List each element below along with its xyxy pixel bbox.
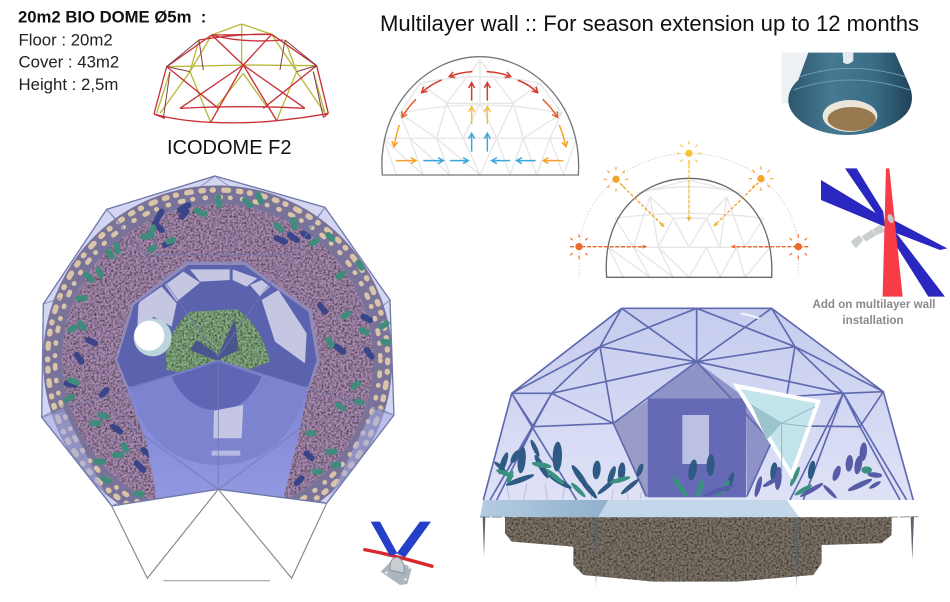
geodesic pattern bbox=[383, 60, 577, 175]
caption: multilayer wall installation bbox=[812, 298, 936, 327]
plinth right bbox=[787, 500, 918, 518]
spec floor: Floor : 20m2 bbox=[18, 30, 113, 50]
outer dome rim bbox=[42, 176, 394, 506]
highlight bbox=[741, 313, 759, 318]
lower rim tint bbox=[42, 408, 394, 506]
center planter bbox=[166, 309, 270, 374]
sun upper left bbox=[604, 167, 628, 192]
stone ring bbox=[53, 195, 383, 525]
spec height: Height : 2,5m bbox=[18, 75, 118, 94]
loose film bbox=[782, 53, 808, 103]
spec cover: Cover : 43m2 bbox=[18, 52, 119, 72]
porthole light bbox=[134, 318, 172, 356]
support legs bbox=[112, 489, 327, 578]
sun arc dotted bbox=[579, 153, 798, 277]
dome struts bbox=[42, 176, 394, 506]
blue struts bbox=[821, 168, 947, 297]
door bbox=[648, 398, 746, 497]
light reflection panel bbox=[213, 405, 243, 438]
gravel bed bbox=[62, 205, 373, 515]
icon: dome frame model bbox=[154, 24, 328, 123]
planter shadow bbox=[190, 318, 238, 361]
sun left bbox=[570, 234, 588, 259]
leaves purple-blue bbox=[702, 442, 882, 500]
pane facets bbox=[752, 405, 815, 475]
plate holes bbox=[385, 567, 411, 580]
blue struts bbox=[371, 522, 431, 557]
plant pots bbox=[507, 483, 642, 499]
panel shadow arc bbox=[130, 362, 307, 465]
caption: multilayer wall installation: installation bbox=[842, 314, 904, 327]
sun right bbox=[790, 234, 807, 259]
yellow arrows bbox=[472, 107, 487, 124]
soil foundation bbox=[505, 517, 892, 582]
illustration: dome top-down interior view bbox=[42, 176, 394, 581]
bolt head bbox=[887, 213, 895, 224]
inner dark floor bbox=[117, 265, 317, 387]
roll body bbox=[788, 53, 912, 135]
highlight bbox=[843, 53, 853, 64]
front floor panel bbox=[127, 360, 308, 498]
leaves dark bbox=[67, 205, 372, 483]
geodesic pattern bbox=[608, 180, 770, 277]
inner raised bed bbox=[115, 262, 320, 388]
door left wall bbox=[613, 400, 648, 497]
base plate bbox=[381, 562, 412, 585]
diagram: air circulation dome bbox=[382, 57, 579, 175]
photo: plastic film roll bbox=[782, 53, 912, 135]
frame struts bbox=[483, 308, 913, 500]
caption: multilayer wall installation: Add on multilayer wall bbox=[812, 298, 936, 311]
bolt bbox=[851, 224, 885, 248]
caption: ICODOME F2: ICODOME F2 bbox=[167, 137, 291, 159]
leaves green bbox=[495, 461, 872, 499]
film winding bands bbox=[793, 68, 910, 90]
door window bbox=[682, 415, 709, 464]
light floor panels bbox=[137, 269, 307, 363]
window pane bbox=[737, 386, 818, 475]
dome glazing bbox=[483, 308, 913, 500]
cardboard core bbox=[823, 100, 877, 132]
sun upper right bbox=[749, 166, 773, 191]
small light bar bbox=[212, 451, 240, 456]
knuckle bbox=[390, 557, 404, 573]
ground pins bbox=[483, 517, 914, 587]
arrowheads bbox=[660, 217, 718, 227]
plinth edge bbox=[480, 517, 918, 519]
heading: dome specs bbox=[18, 8, 206, 94]
red base ring bbox=[363, 549, 433, 567]
planter reflection bbox=[172, 362, 262, 411]
core opening bbox=[828, 107, 876, 131]
title: multilayer wall: Multilayer wall :: For season extension up to 12 months bbox=[380, 11, 919, 36]
multilayer window highlight bbox=[737, 386, 818, 475]
dome outline bbox=[606, 178, 772, 277]
leaves green bbox=[67, 195, 390, 494]
red strut bbox=[883, 168, 903, 297]
blue arrows bbox=[423, 133, 536, 161]
orange sun rays bbox=[620, 183, 758, 227]
red arrows bbox=[422, 72, 538, 101]
orange arrows bbox=[394, 125, 566, 161]
door right wall bbox=[746, 399, 772, 497]
diagram: sun paths dome bbox=[570, 141, 808, 277]
door canopy bbox=[648, 362, 746, 398]
red-orange sun rays bbox=[570, 245, 808, 249]
icon: foot connector bbox=[363, 522, 433, 585]
orange-red arrows bbox=[402, 99, 558, 117]
base line shadow bbox=[163, 579, 270, 583]
dome outline bbox=[382, 57, 579, 175]
illustration: dome front view bbox=[480, 308, 918, 587]
spec title: 20m2 BIO DOME Ø5m : bbox=[18, 8, 206, 26]
yellow sun ray bbox=[687, 160, 691, 220]
plinth left bbox=[480, 500, 608, 517]
sun top bbox=[677, 141, 701, 166]
plinth center bbox=[598, 500, 800, 518]
icon: multilayer wall connector bbox=[821, 168, 947, 297]
leaves dark blue bbox=[493, 439, 817, 500]
